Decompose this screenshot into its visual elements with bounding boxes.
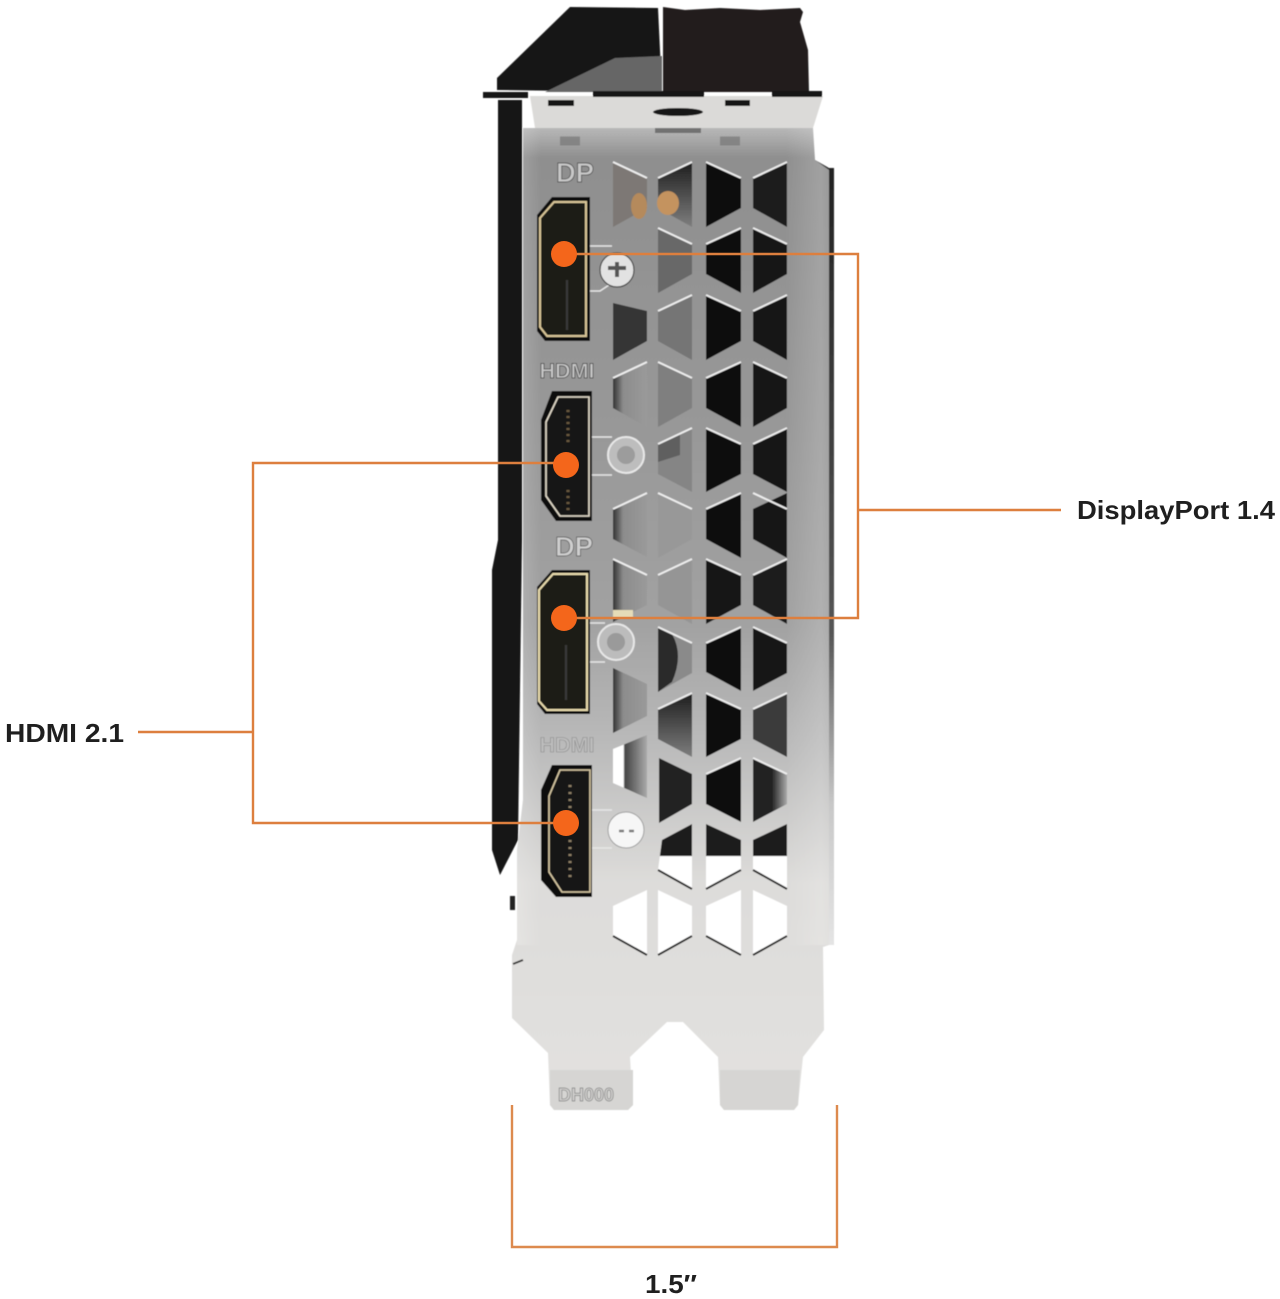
- screw: lower HDMI: [608, 812, 644, 848]
- plate sheen: [517, 128, 829, 945]
- right tab shade: [720, 1070, 800, 1110]
- dimension bracket: [512, 1105, 837, 1247]
- row 8 vents: [613, 627, 787, 733]
- marker: HDMI lower: [553, 810, 579, 836]
- callout lines: HDMI: [138, 463, 566, 823]
- slot shadow: [655, 128, 701, 133]
- port label: HDMI upper: HDMI: [540, 360, 594, 383]
- row 11 vents: [658, 824, 787, 889]
- screw: lower DP: [598, 624, 634, 660]
- row 5 vents: [658, 428, 787, 492]
- HDMI connector, upper: [541, 391, 592, 521]
- port label: DP top: DP: [556, 157, 594, 188]
- row 6 vents: [613, 493, 787, 558]
- DisplayPort connector, top: [537, 197, 590, 341]
- label: HDMI 2.1: HDMI 2.1: [5, 718, 124, 748]
- screw: upper HDMI: [608, 437, 644, 473]
- vent top highlights: [613, 162, 787, 774]
- row 1 vents: [613, 162, 787, 227]
- DisplayPort connector, lower: [537, 570, 590, 714]
- label: DisplayPort 1.4: DisplayPort 1.4: [1077, 495, 1276, 525]
- port label: DP lower: DP: [555, 531, 593, 562]
- row 4 vents: [613, 362, 787, 427]
- top bracket fold: [530, 96, 823, 128]
- graphics card bracket illustration: [483, 7, 834, 1110]
- heatsink fins block: [663, 7, 809, 92]
- bracket notch mark: [513, 960, 523, 964]
- row 10 vents: [659, 758, 787, 823]
- marker: DisplayPort top: [551, 241, 577, 267]
- port label: HDMI lower: HDMI: [540, 734, 594, 757]
- row 3 vents: [613, 295, 787, 360]
- left tab shade: [550, 1070, 633, 1110]
- callout lines: DisplayPort: [564, 254, 1061, 618]
- bracket stamp: DH000: [558, 1085, 614, 1105]
- HDMI connector, lower: [541, 765, 592, 897]
- screw: top DP: [600, 253, 634, 287]
- fold shadows: [560, 136, 740, 146]
- row 12 vents: [613, 890, 787, 955]
- marker: DisplayPort lower: [551, 605, 577, 631]
- I/O plate: [512, 128, 829, 1110]
- row 2 vents: [658, 228, 787, 293]
- row 7 vents: [613, 559, 787, 624]
- row 9 vents: [613, 693, 787, 798]
- left side card shroud strip: [492, 100, 522, 875]
- plate rear dark edge: [815, 160, 834, 945]
- shroud shaded recess: [545, 56, 662, 92]
- screw tab outlines: [590, 246, 612, 848]
- side latch mark: [510, 896, 515, 910]
- vent lower dark edges: [613, 870, 787, 955]
- top bracket dark rim: [483, 94, 822, 103]
- label: 1.5 inch width: 1.5″: [645, 1269, 697, 1299]
- vent grid: [613, 162, 787, 955]
- marker: HDMI upper: [553, 452, 579, 478]
- top bracket slot: [653, 108, 703, 116]
- heatsink shroud, dark angled part: [497, 7, 662, 92]
